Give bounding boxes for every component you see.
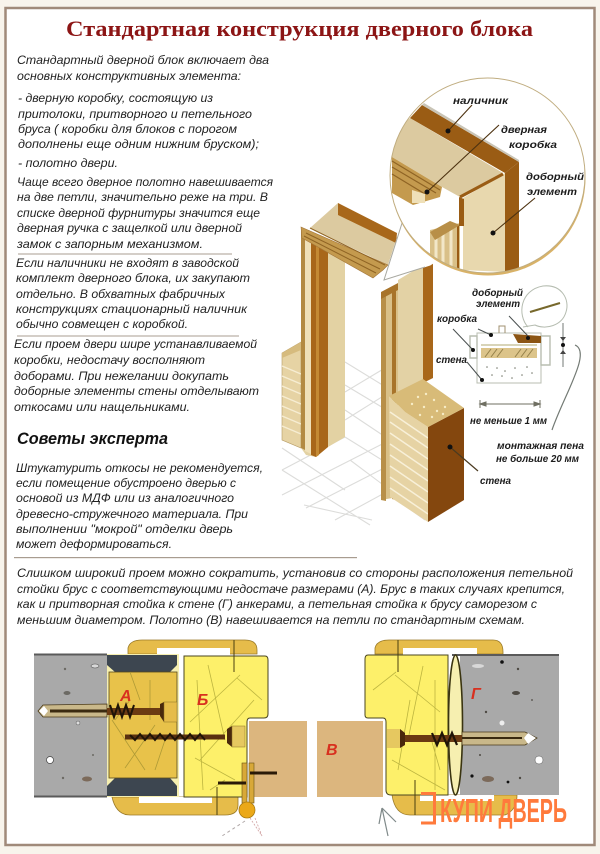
right casings: [375, 640, 517, 815]
letter B: Б: [197, 692, 208, 709]
hinge screws: [218, 773, 277, 783]
right concrete wall: [452, 654, 559, 795]
text block: narrowing the opening: стойки брус с соответствующими недостаче размерами (А). Брус в таких случаях крепится,: [17, 582, 565, 596]
text block: expert tips: древесно-стружечного материала. При: [16, 507, 248, 521]
text block: expert tips: Штукатурить откосы не рекомендуется,: [16, 461, 263, 475]
letter V: В: [326, 742, 338, 759]
text block: casings: конструкциях стационарный наличник: [16, 302, 248, 316]
heading: expert tips: Советы эксперта: [17, 429, 168, 448]
text block: intro: - дверную коробку, состоящую из: [18, 91, 213, 105]
label: element: элемент: [527, 186, 577, 198]
cross-section diagram: [436, 286, 584, 487]
arrow: [379, 808, 396, 836]
circle leaders: [424, 105, 535, 236]
text block: casings: отдельно. В обхватных фабричных: [16, 287, 226, 301]
text block: extensions: коробки, недостачу восполняют: [14, 353, 205, 367]
text block: narrowing the opening: меньшим диаметром. Полотно (В) навешивается на петли по стандартным схемам.: [17, 613, 525, 627]
foam gap: [448, 655, 462, 795]
label: frame box: коробка: [509, 139, 557, 151]
text block: expert tips: выполнении "мокрой" отделки дверь: [16, 522, 233, 536]
text block: casings: [16, 256, 250, 331]
installation plan diagram: [34, 640, 559, 836]
text block: expert tips: может деформироваться.: [16, 537, 172, 551]
text block: intro: бруса ( коробки для блоков с порогом: [18, 122, 237, 136]
door frame illustration: [282, 78, 586, 525]
text block: hinges: [16, 175, 274, 251]
text block: hinges: Чаще всего дверное полотно навешивается: [17, 175, 274, 189]
text block: intro: Стандартный дверной блок включает два: [17, 53, 269, 67]
bubble with screw: [522, 286, 567, 327]
floor tile grid: [282, 362, 425, 525]
text block: expert tips: если помещение обустроено дверью с: [16, 476, 236, 490]
hinge: [222, 763, 262, 836]
foam gap dimension: [552, 323, 580, 430]
text block: extensions: Если проем двери шире устанавливаемой: [14, 337, 257, 351]
label: wall leader: стена: [480, 475, 511, 487]
right door jamb: [381, 258, 433, 501]
left door jamb: [301, 227, 345, 457]
right door leaf: [317, 721, 383, 797]
label: wall: стена: [436, 354, 467, 366]
text block: narrowing the opening: как и притворная стойка к стене (Г) анкерами, а петельная стойка к брусу саморезом с: [17, 597, 537, 611]
text block: intro: [17, 53, 269, 170]
letter A: А: [119, 688, 132, 705]
left wall block: [282, 342, 301, 448]
text block: intro: - полотно двери.: [18, 156, 118, 170]
lintel: [301, 203, 397, 278]
label: casing: наличник: [453, 95, 509, 107]
text block: hinges: списке дверной фурнитуры значится еще: [17, 206, 260, 220]
magnifier pointer: [384, 190, 470, 280]
text block: expert tips: [16, 461, 263, 551]
label: foam: монтажная пена: [497, 440, 584, 452]
left concrete wall: [34, 654, 107, 798]
anchor left: [38, 702, 177, 722]
label: extension: доборный: [526, 171, 585, 183]
text block: intro: притолоки, притворного и петельного: [18, 107, 252, 121]
text block: casings: комплект дверного блока, их закупают: [16, 271, 250, 285]
label: element: элемент: [476, 298, 520, 310]
right jamb: [365, 640, 448, 815]
text block: extensions: доборные элементы стены отделывают: [14, 384, 259, 398]
width dimension arrow: [480, 400, 540, 408]
text block: hinges: дверная ручка с защелкой или дверной: [17, 221, 242, 235]
section leaders: [453, 316, 530, 382]
label: min gap: не меньше 1 мм: [470, 415, 547, 427]
left casings: [112, 640, 257, 815]
wall and frame section: [470, 326, 550, 383]
text block: expert tips: основой из МДФ или из аналогичного: [16, 491, 234, 505]
text block: casings: Если наличники не входят в заводской: [16, 256, 239, 270]
label: door frame: дверная: [501, 124, 547, 136]
left jamb B: [184, 640, 268, 815]
label: max foam: не больше 20 мм: [496, 453, 579, 465]
label: wall leader: [448, 444, 511, 487]
right wall block: [389, 379, 464, 522]
text block: extensions: [14, 337, 259, 414]
left door leaf: [249, 721, 307, 797]
text block: narrowing the opening: Слишком широкий проем можно сократить, установив со стороны расположения петельной: [17, 566, 573, 580]
text block: hinges: на две петли, значительно реже на три. В: [17, 190, 268, 204]
text block: casings: обычно совмещен с коробкой.: [16, 317, 188, 331]
text block: narrowing the opening: [17, 566, 573, 627]
letter G: Г: [471, 686, 482, 703]
label: frame: коробка: [437, 313, 477, 325]
title: Стандартная конструкция дверного блока: [66, 16, 533, 41]
text block: extensions: доборами. При нежелании докупать: [14, 369, 229, 383]
anchor right: [387, 729, 537, 748]
text block: extensions: откосами или нащельниками.: [14, 400, 190, 414]
text block: intro: дополнены еще одним нижним бруском);: [18, 137, 259, 151]
label: extension: доборный: [472, 287, 524, 299]
screw to beam: [125, 726, 245, 747]
text block: hinges: замок с запорным механизмом.: [16, 237, 203, 251]
text block: intro: основных конструктивных элемента:: [17, 69, 241, 83]
insert beam A: [107, 654, 179, 797]
detail circle: [385, 78, 586, 276]
